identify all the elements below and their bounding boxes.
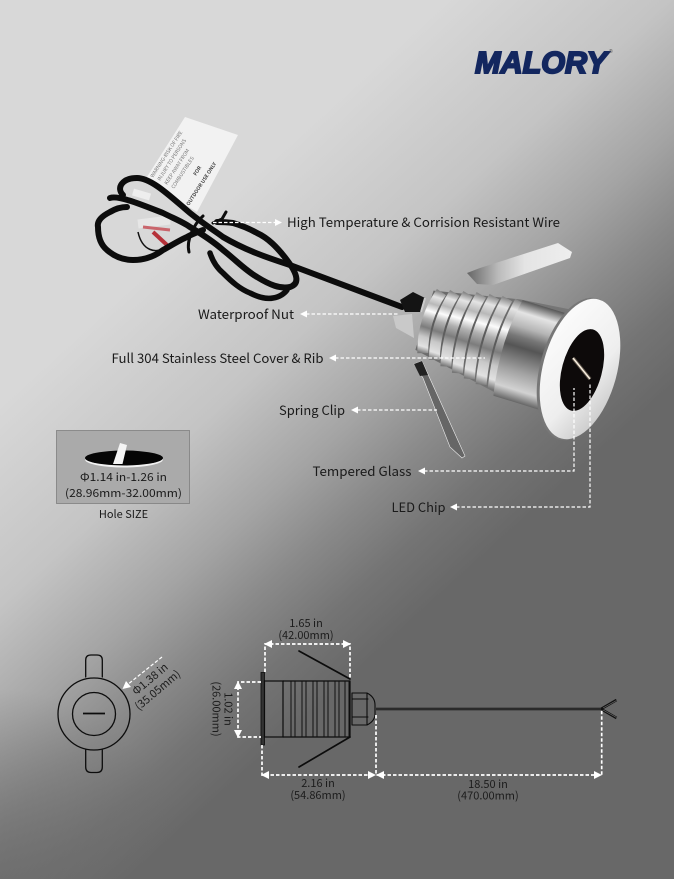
panel: hole size: Φ1.14 in-1.26 in <box>80 469 167 485</box>
warning tag: KEEP AWAY FROM <box>163 148 191 186</box>
clips <box>299 651 350 679</box>
dimension: 1.02 in: 1.02 in <box>220 692 236 726</box>
callout: LED chip: LED Chip <box>392 497 446 516</box>
dimension: 18.50 in: (470.00mm) <box>457 788 519 804</box>
callout: spring clip <box>279 400 437 419</box>
dimension: 18.50 in: 18.50 in <box>468 776 508 792</box>
product photo: nut <box>393 292 425 338</box>
panel: hole size <box>56 430 190 522</box>
nut <box>352 693 375 725</box>
panel: hole size: Hole SIZE <box>99 506 148 522</box>
product photo: spring clips <box>414 243 572 458</box>
warning tag: COMBUSTIBLES <box>170 155 196 190</box>
lens <box>552 324 612 416</box>
product photo: flange and lens <box>522 289 634 449</box>
wire ends <box>133 192 170 251</box>
callout: stainless steel cover <box>112 348 485 367</box>
warning tag: INJURY TO PERSONS <box>156 138 188 182</box>
dimension: 1.65 in <box>264 615 351 679</box>
callout: stainless steel cover: Full 304 Stainless Steel Cover & Rib <box>112 348 324 367</box>
diagram: side view <box>261 651 616 767</box>
product photo: cable with tag <box>98 117 402 307</box>
callout: tempered glass: Tempered Glass <box>312 461 412 480</box>
bottom clip <box>414 361 465 458</box>
wire <box>376 700 616 718</box>
dimension: 1.65 in: 1.65 in <box>289 615 323 631</box>
dimension: 2.16 in <box>261 745 376 803</box>
warning tag: FOR <box>192 164 204 177</box>
panel: hole size: (28.96mm-32.00mm) <box>65 485 182 501</box>
logo: Malory: ® <box>609 48 613 55</box>
top clip <box>467 243 572 285</box>
dimension: diameter: (35.05mm) <box>131 666 184 714</box>
callout: high temperature wire: High Temperature & Corrision Resistant Wire <box>287 212 560 231</box>
warning tag: OUTDOOR USE ONLY <box>185 161 218 207</box>
diagram: front view <box>58 655 184 772</box>
dimension: 18.50 in <box>376 709 602 804</box>
warning tag: WARNING-RISK OF FIRE <box>149 130 184 179</box>
warning tag <box>145 117 238 212</box>
callout: waterproof nut <box>198 304 398 323</box>
callout: waterproof nut: Waterproof Nut <box>198 304 294 323</box>
main cable <box>290 265 402 307</box>
product photo: body with fins <box>409 270 572 411</box>
dimension: 1.02 in: (26.00mm) <box>208 681 224 737</box>
dimension: 2.16 in: (54.86mm) <box>290 787 346 803</box>
dimension: 2.16 in: 2.16 in <box>301 775 335 791</box>
logo: Malory: MALORY <box>475 45 610 80</box>
callout: tempered glass <box>312 388 574 480</box>
cable loops <box>98 178 296 298</box>
dimension: 1.02 in <box>208 681 261 738</box>
LED chip <box>573 358 590 379</box>
callout: LED chip <box>392 383 590 516</box>
ribs <box>291 681 349 737</box>
smooth collar <box>489 299 570 410</box>
cable tie <box>188 216 203 252</box>
dimension: 1.65 in: (42.00mm) <box>278 627 334 643</box>
dimension: diameter: Φ1.38 in <box>129 659 171 699</box>
icon: cutout hole <box>85 443 163 468</box>
fins <box>414 277 520 389</box>
callout: spring clip: Spring Clip <box>279 400 345 419</box>
